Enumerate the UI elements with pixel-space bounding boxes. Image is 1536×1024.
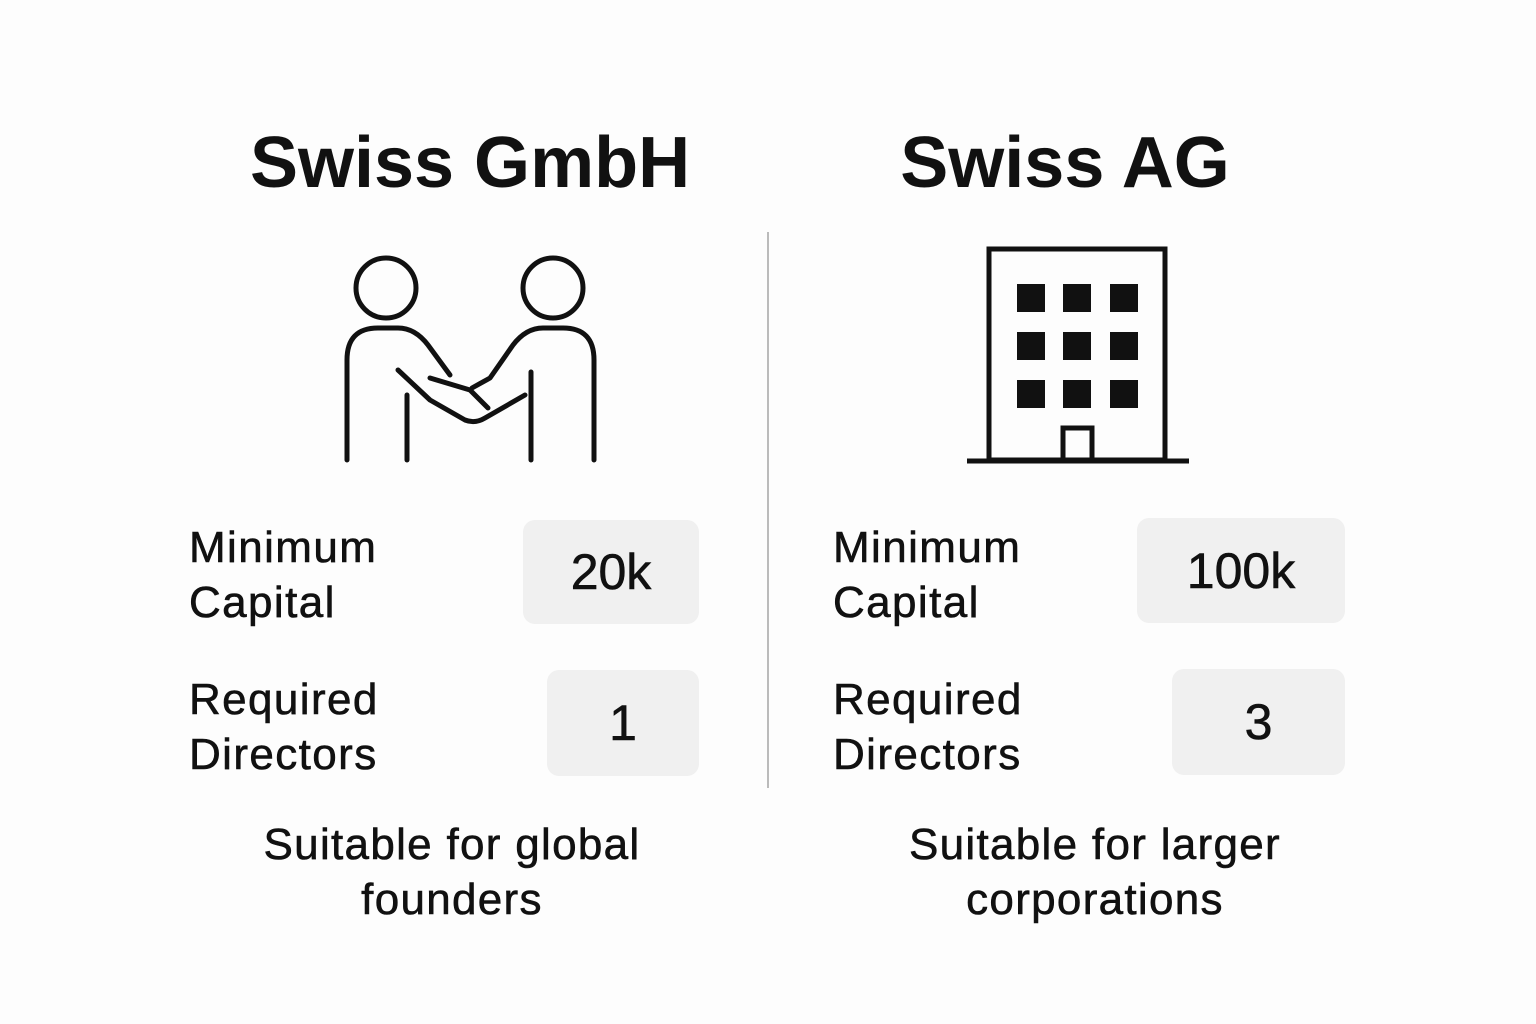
label: AG minimum capital: Minimum [833,523,1021,572]
value box: 1: 1 [609,695,637,751]
footer: GmbH suitability [264,820,640,924]
footer: GmbH suitability: Suitable for global [264,820,640,869]
footer: AG suitability [909,820,1281,924]
value box: 3 [1172,669,1345,775]
label: AG required directors [833,675,1023,779]
label: AG required directors: Directors [833,730,1022,779]
value box: 100k: 100k [1187,542,1295,598]
icon: handshake [344,256,596,462]
label: GmbH required directors: Required [189,675,379,724]
label: AG minimum capital [833,523,1021,627]
title: Swiss AG: Swiss AG [900,123,1230,203]
value box: 20k [523,520,699,624]
label: GmbH minimum capital [189,523,377,627]
label: GmbH required directors: Directors [189,730,378,779]
label: GmbH minimum capital: Minimum [189,523,377,572]
footer: GmbH suitability: founders [361,875,543,924]
icon: building [967,246,1189,464]
value box: 1 [547,670,699,776]
label: AG required directors: Required [833,675,1023,724]
value box: 20k: 20k [571,544,651,600]
footer: AG suitability: corporations [966,875,1224,924]
label: AG minimum capital: Capital [833,578,980,627]
label: GmbH required directors [189,675,379,779]
value box: 100k [1137,518,1345,623]
label: GmbH minimum capital: Capital [189,578,336,627]
value box: 3: 3 [1245,694,1272,750]
footer: AG suitability: Suitable for larger [909,820,1281,869]
title: Swiss GmbH: Swiss GmbH [250,123,690,203]
